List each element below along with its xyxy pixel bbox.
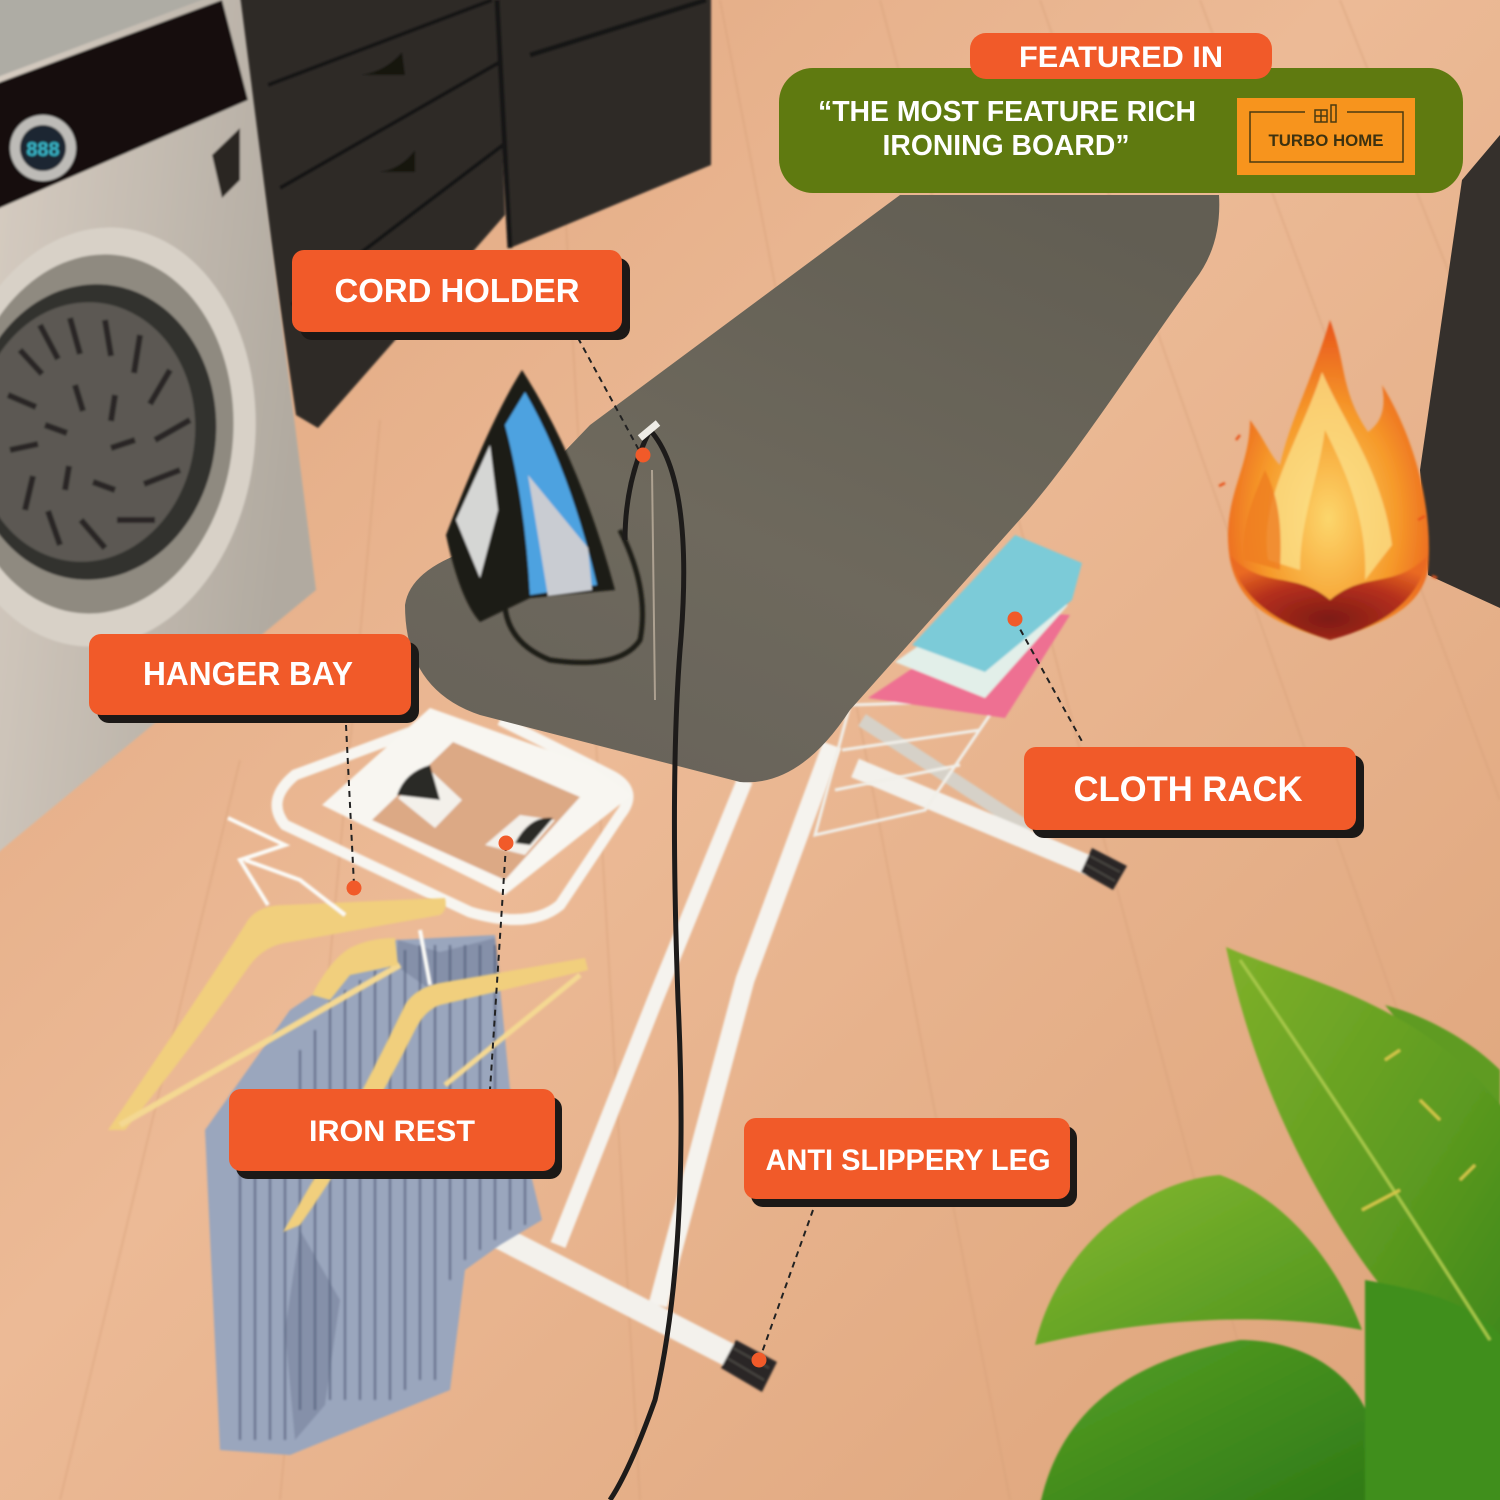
callout: featured in banner: IRONING BOARD” — [882, 130, 1130, 162]
washing machine: 888 — [26, 139, 60, 161]
cloth rack with towels — [815, 535, 1082, 835]
foot: rear rubber cap — [1081, 848, 1127, 890]
shirt on hangers — [205, 935, 542, 1455]
flame — [1219, 320, 1437, 640]
leader: cloth rack — [1008, 612, 1084, 745]
flame sparks — [1219, 435, 1437, 578]
callout: featured in banner: “THE MOST FEATURE RICH — [818, 96, 1196, 128]
label: anti slippery leg: ANTI SLIPPERY LEG — [766, 1144, 1050, 1177]
logo: turbo home — [1237, 98, 1415, 175]
cabinets: dark drawers top — [226, 0, 711, 428]
callout: featured in banner — [779, 33, 1463, 193]
label: anti slippery leg — [744, 1118, 1077, 1207]
leader: cord holder — [578, 338, 650, 462]
power cord — [610, 430, 684, 1500]
shirt folds — [285, 938, 500, 1440]
label: hanger bay: HANGER BAY — [143, 655, 353, 692]
logo: turbo home: TURBO HOME — [1268, 131, 1384, 150]
leader: iron rest — [490, 836, 514, 1090]
iron — [446, 370, 642, 662]
cabinet: dark right edge — [1420, 135, 1500, 608]
foot: front rubber cap — [721, 1340, 777, 1392]
leader: anti slippery leg — [752, 1210, 813, 1368]
callout: featured in banner: FEATURED IN — [1019, 41, 1223, 74]
label: iron rest: IRON REST — [309, 1115, 475, 1148]
label: cloth rack: CLOTH RACK — [1074, 770, 1302, 809]
label: cord holder: CORD HOLDER — [334, 272, 580, 309]
legs of board — [490, 720, 1127, 1392]
washing machine — [0, 0, 316, 855]
label: cloth rack — [1024, 747, 1364, 838]
label: cord holder — [292, 250, 630, 340]
label: hanger bay — [89, 634, 419, 723]
hangers — [108, 818, 588, 1232]
label: iron rest — [229, 1089, 562, 1179]
ironing board top — [405, 195, 1219, 782]
leader: hanger bay — [346, 725, 362, 896]
plant — [1035, 947, 1500, 1500]
hanger bay and iron rest frame — [277, 708, 632, 920]
